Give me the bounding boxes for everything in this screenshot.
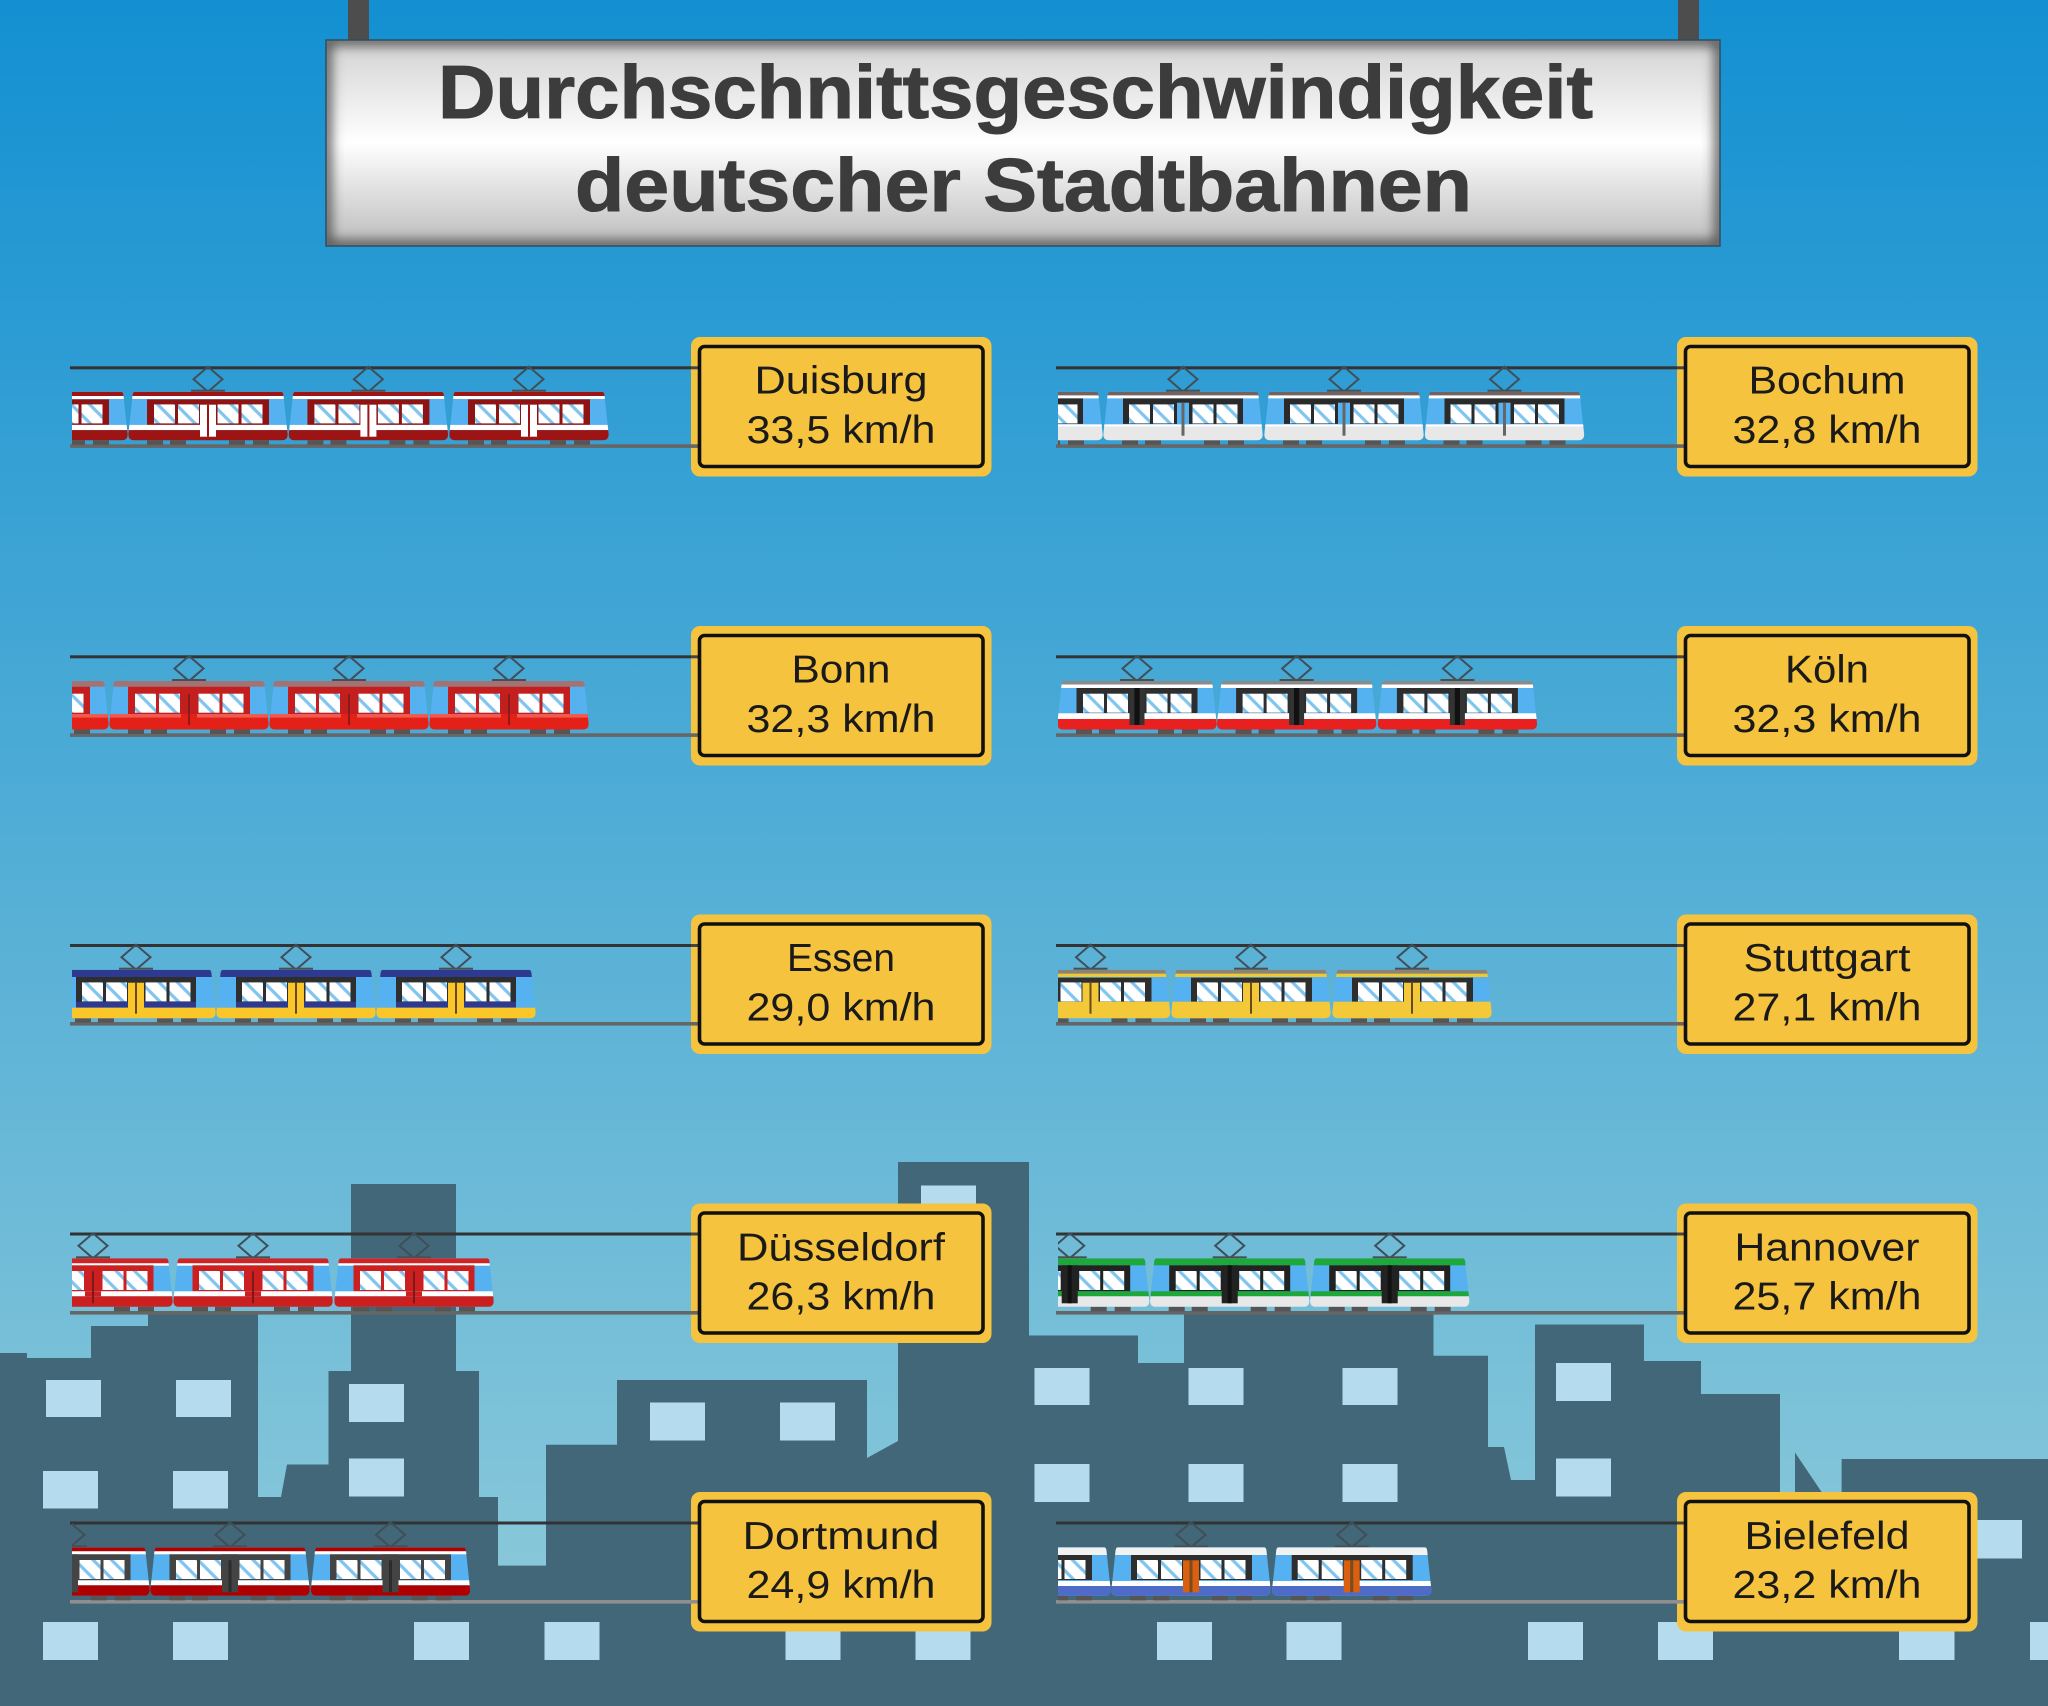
- sign: Stuttgart: Stuttgart: [1744, 937, 1911, 980]
- sign: Essen: [691, 914, 992, 1054]
- row: Bochum: [1056, 366, 1677, 448]
- sign: Köln: Köln: [1785, 648, 1869, 692]
- sign: Bochum: 32,8 km/h: [1732, 409, 1922, 452]
- tram: Dortmund: [72, 1521, 470, 1600]
- sign: Dortmund: Dortmund: [742, 1515, 940, 1558]
- title text: deutscher Stadtbahnen: [575, 143, 1472, 227]
- row: Bonn: [70, 654, 691, 737]
- sign: Bielefeld: Bielefeld: [1744, 1515, 1910, 1558]
- sign: Bonn: Bonn: [792, 648, 890, 692]
- sign: Stuttgart: 27,1 km/h: [1732, 986, 1922, 1030]
- sign: Bonn: 32,3 km/h: [746, 698, 936, 741]
- row: Dortmund: [70, 1521, 691, 1604]
- sign: Düsseldorf: 26,3 km/h: [746, 1276, 936, 1318]
- tram: Köln: [1057, 656, 1537, 734]
- sign: Düsseldorf: Düsseldorf: [737, 1226, 945, 1270]
- sign: Hannover: [1677, 1204, 1978, 1343]
- tram: Essen: [56, 945, 536, 1023]
- sign: Duisburg: [691, 337, 992, 476]
- tram: Düsseldorf: [72, 1232, 494, 1312]
- row: Essen: [56, 944, 700, 1026]
- sign: Dortmund: [691, 1492, 992, 1632]
- sign: Köln: [1677, 626, 1978, 766]
- row: Köln: [1056, 655, 1686, 737]
- city skyline silhouette: [0, 1162, 2048, 1706]
- title text: Durchschnittsgeschwindigkeit: [438, 50, 1593, 134]
- sign: Essen: Essen: [787, 937, 895, 980]
- sign: Bochum: Bochum: [1748, 360, 1906, 402]
- sign: Dortmund: 24,9 km/h: [746, 1564, 936, 1607]
- row: Duisburg: [0, 366, 700, 448]
- sign: Bonn: [691, 626, 992, 766]
- row: Bielefeld: [1056, 1521, 1677, 1604]
- sign: Hannover: 25,7 km/h: [1732, 1276, 1922, 1318]
- sign: Köln: 32,3 km/h: [1732, 698, 1922, 741]
- sign: Düsseldorf: [691, 1204, 992, 1343]
- tram: Bochum: [1058, 366, 1584, 444]
- title text: [438, 50, 1593, 227]
- row: Stuttgart: [1010, 944, 1686, 1026]
- tram: Duisburg: [72, 365, 609, 444]
- row: Düsseldorf: [13, 1232, 700, 1315]
- sign: Stuttgart: [1677, 914, 1978, 1054]
- sign: Duisburg: 33,5 km/h: [746, 409, 936, 452]
- sign: Duisburg: Duisburg: [754, 360, 928, 402]
- tram: Hannover: [1058, 1232, 1470, 1312]
- sign: Hannover: Hannover: [1734, 1226, 1920, 1270]
- sign: Bielefeld: 23,2 km/h: [1732, 1564, 1922, 1607]
- sign: Essen: 29,0 km/h: [746, 986, 936, 1030]
- tram: Bonn: [72, 654, 589, 734]
- sign: Bielefeld: [1677, 1492, 1978, 1632]
- tram: Bielefeld: [1058, 1521, 1432, 1600]
- sign: Bochum: [1677, 337, 1978, 476]
- row: Hannover: [990, 1232, 1686, 1315]
- title sign with hangers: [326, 0, 1720, 246]
- tram: Stuttgart: [1010, 945, 1492, 1023]
